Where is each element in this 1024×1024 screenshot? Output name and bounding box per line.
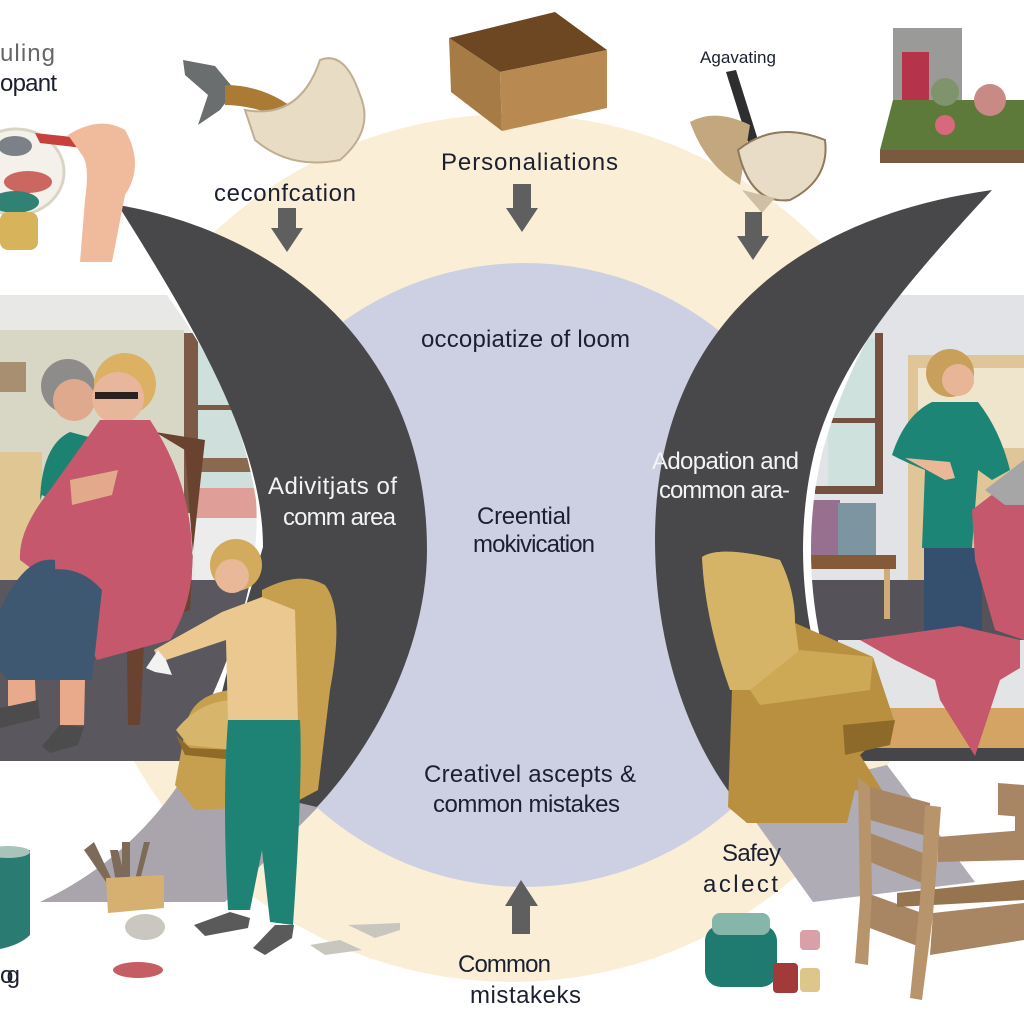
arrow: bottom up: [505, 880, 538, 934]
person: carer in green: [892, 349, 1024, 640]
armchair: left: [175, 579, 336, 810]
text block: safety: [703, 840, 781, 898]
text block: common mistakes: mistakeks: [470, 982, 581, 1009]
text block: right crescent: [652, 448, 799, 504]
label: top-left partial text: opant: [0, 70, 57, 97]
text block: centre: Creential: [477, 503, 571, 530]
label: top-left partial text: [0, 40, 57, 97]
text block: right crescent: Adopation and: [652, 448, 799, 475]
icon: paint palette and hand: [0, 124, 135, 262]
heading: Agavating: Agavating: [700, 48, 776, 67]
icon: green candle jar, bottom left: [0, 846, 30, 949]
label: bottom-left partial text: og: [0, 962, 20, 989]
arrow: left: [271, 208, 303, 252]
text block: common mistakes: Common: [458, 951, 551, 978]
arrow: right: [737, 212, 769, 260]
icon: paper scraps: [310, 923, 400, 955]
armchair: right: [702, 552, 895, 823]
text block: left crescent: comm area: [283, 504, 397, 531]
chair: [126, 432, 205, 725]
icon: garden with brick wall: [880, 28, 1024, 163]
text block: left crescent: Adivitjats of: [268, 473, 397, 500]
icon: wooden box: [449, 12, 607, 131]
text block: common mistakes: [458, 951, 581, 1009]
label: top-left partial text: uling: [0, 40, 55, 67]
icon: brush pot and items: [84, 842, 165, 978]
text block: creative aspects: common mistakes: [433, 791, 620, 818]
text block: centre: [473, 503, 595, 558]
white band: right: [811, 285, 898, 760]
arrow: centre top: [506, 184, 538, 232]
person: standing woman: [146, 539, 301, 955]
cream background circle: [78, 114, 946, 982]
person: older helper: [40, 359, 94, 500]
heading: Personalizations: Personaliations: [441, 149, 618, 176]
panel: right room scene: [800, 295, 1024, 765]
text block: safety: Safey: [722, 840, 781, 867]
text block: safety: aclect: [703, 871, 778, 898]
panel: left room scene: [0, 295, 270, 765]
floor shadow: left: [40, 775, 320, 902]
floor shadow: right: [740, 765, 975, 902]
person: seated woman in pink shawl: [0, 353, 192, 753]
icon: wooden chair frame: [855, 777, 1024, 1000]
text block: left crescent: [268, 473, 397, 531]
heading: ceconfcation: ceconfcation: [214, 180, 356, 207]
text block: centre: mokivication: [473, 531, 595, 558]
white band: left: [160, 285, 257, 770]
text block: creative aspects: [424, 761, 636, 818]
bed with pink blanket: [820, 626, 1024, 761]
icon: shells with brush: [690, 70, 826, 213]
heading: occopiatize of loom: occopiatize of loom: [421, 326, 630, 353]
dark crescent: right: [655, 190, 992, 800]
text block: right crescent: common ara-: [659, 477, 790, 504]
text block: creative aspects: Creativel ascepts &: [424, 761, 636, 788]
icon: scraper and shell: [183, 58, 364, 162]
icon: green jar and small pots: [705, 913, 820, 993]
lavender central circle: [213, 263, 837, 887]
dark crescent: left: [118, 205, 427, 807]
